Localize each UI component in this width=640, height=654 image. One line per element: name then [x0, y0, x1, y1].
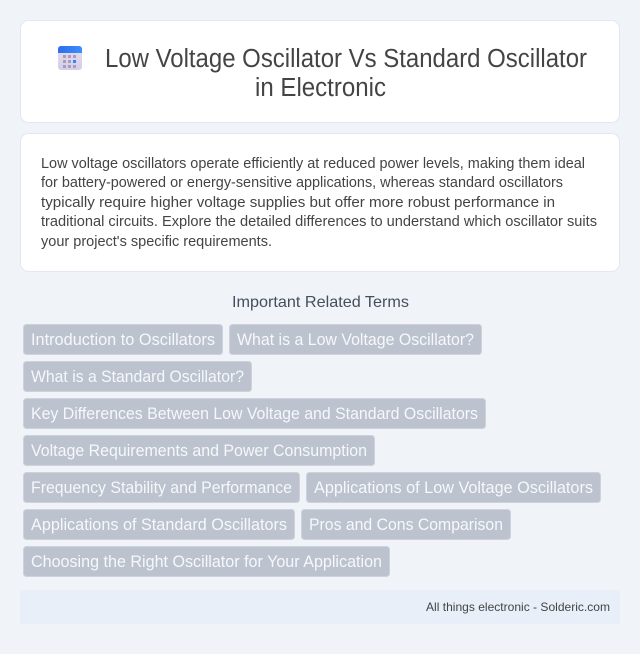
- heading: important related terms: Important Related Terms: [232, 294, 409, 311]
- title: Low Voltage Oscillator Vs Standard Oscillator: [105, 45, 587, 73]
- tag list: What is a Standard Oscillator?: [31, 368, 244, 386]
- title: in Electronic: [255, 74, 386, 102]
- icon: calendar: [58, 46, 82, 70]
- title: [105, 45, 587, 102]
- text block: description: Low voltage oscillators operate efficiently at reduced power levels, making them ideal: [41, 156, 585, 172]
- tag list: Voltage Requirements and Power Consumption: [31, 442, 367, 460]
- tag list: Choosing the Right Oscillator for Your Application: [31, 553, 382, 571]
- footer: All things electronic - Solderic.com: [426, 600, 610, 614]
- tag list: Frequency Stability and Performance: [31, 479, 292, 497]
- tag list: Key Differences Between Low Voltage and Standard Oscillators: [31, 405, 478, 423]
- text block: description: your project's specific requirements.: [41, 234, 272, 250]
- footer: [20, 590, 620, 624]
- tag list: Applications of Standard Oscillators: [31, 516, 287, 534]
- tag list: What is a Low Voltage Oscillator?: [237, 331, 474, 349]
- tag list: Applications of Low Voltage Oscillators: [314, 479, 593, 497]
- panel: title card: [20, 20, 620, 122]
- text block: description: typically require higher voltage supplies but offer more robust performance in: [41, 195, 555, 211]
- text block: description: [41, 156, 597, 250]
- tag list: [24, 324, 600, 576]
- tag list: Introduction to Oscillators: [31, 331, 215, 349]
- text block: description: for battery-powered or energy-sensitive applications, whereas standard oscillators: [41, 175, 563, 191]
- tag list: Pros and Cons Comparison: [309, 516, 503, 534]
- text block: description: traditional circuits. Explore the detailed differences to understand which oscillator suits: [41, 214, 597, 230]
- panel: description: [20, 134, 620, 272]
